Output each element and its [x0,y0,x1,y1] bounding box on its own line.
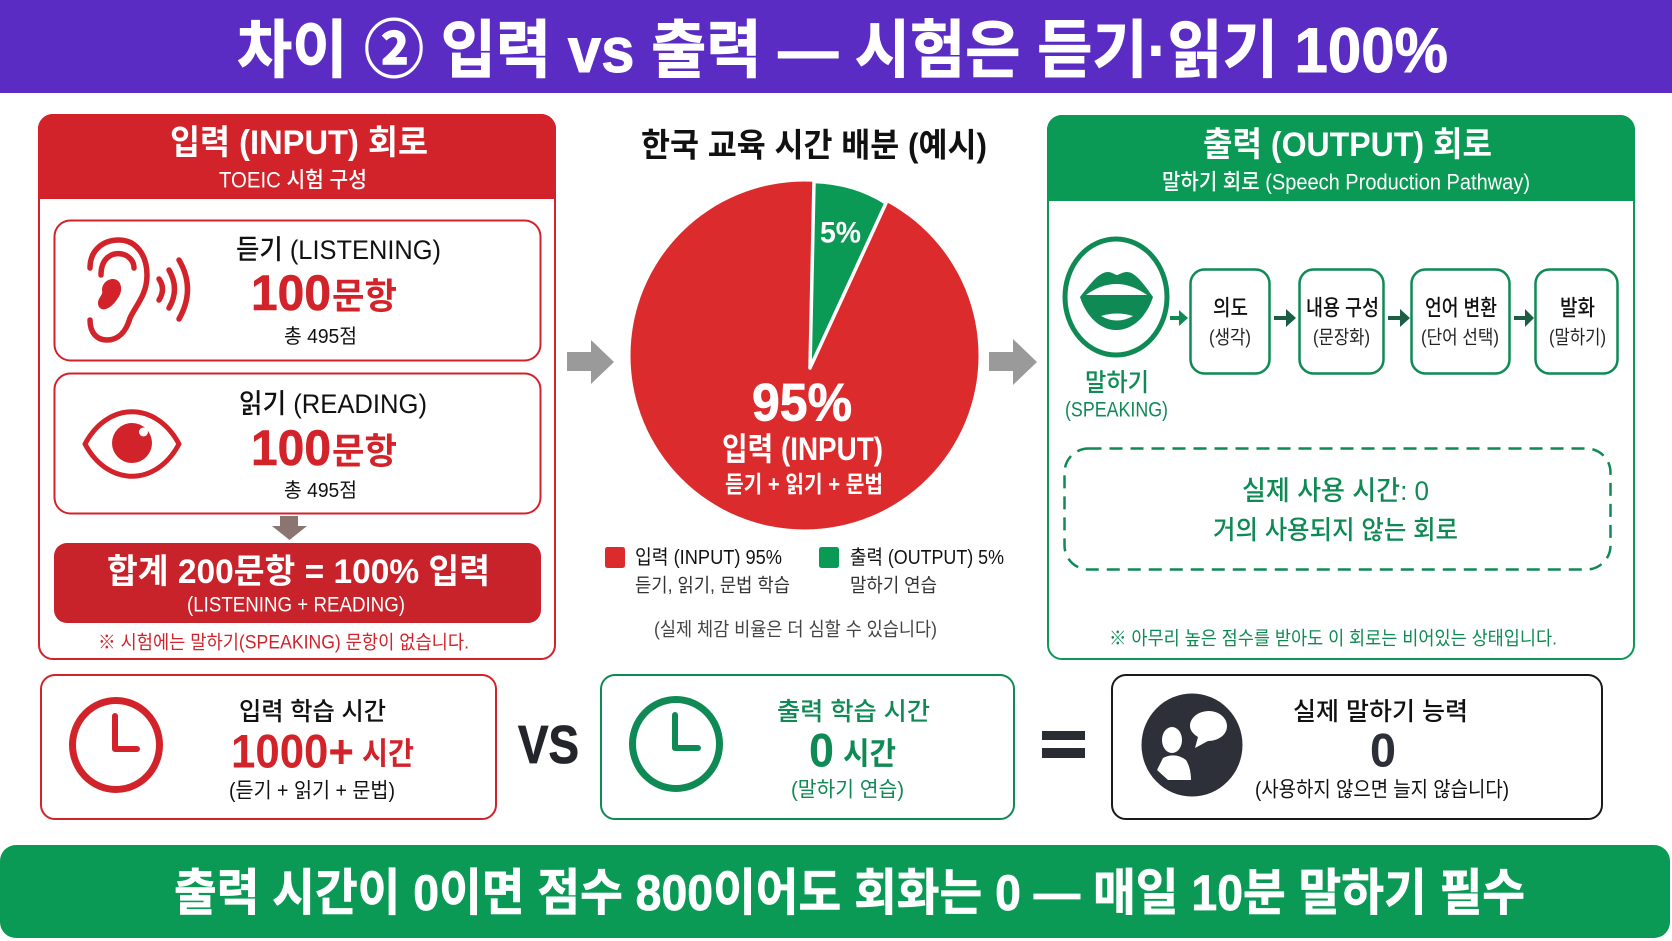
step: utterance: (말하기) [1549,326,1606,348]
step: language: 언어 변환 [1425,296,1497,320]
step: intent: 의도 [1213,296,1248,320]
panel: output circuit [1047,115,1635,659]
legend: input: 입력 (INPUT) 95% [635,546,782,569]
total box: (LISTENING + READING) [187,594,405,616]
step: content: (문장화) [1313,326,1370,348]
total box: 합계 200문항 = 100% 입력 [107,553,490,591]
card: input study time: 1000+ [231,724,354,778]
card: actual speaking ability [1112,675,1602,819]
speaking label: 말하기 [1085,369,1149,397]
input panel header: 입력 (INPUT) 회로 [170,124,428,162]
step: utterance [1536,270,1618,374]
listening card [54,220,540,360]
step: language: (단어 선택) [1421,326,1499,348]
input panel header: TOEIC 시험 구성 [219,168,367,192]
symbol: equals [1042,731,1085,758]
output panel header: 말하기 회로 (Speech Production Pathway) [1162,170,1530,194]
slice label 95%: 95% [752,374,852,432]
arrow: language to utterance [1514,309,1534,327]
slice description: 듣기 + 읽기 + 문법 [725,471,883,497]
output panel footnote: ※ 아무리 높은 점수를 받아도 이 회로는 비어있는 상태입니다. [1109,628,1557,650]
arrow: chart to output [989,339,1037,385]
icon: speaker with bubble [1142,694,1242,796]
speaking label: (SPEAKING) [1065,398,1168,422]
total box [54,543,541,623]
card: output study time: 출력 학습 시간 [777,698,930,726]
legend: output: 출력 (OUTPUT) 5% [850,546,1004,569]
legend: output: 말하기 연습 [850,574,937,596]
listening label: 듣기 (LISTENING) [236,235,441,265]
card: input study time: 시간 [362,736,414,772]
step: utterance: 발화 [1560,296,1595,320]
panel: input circuit [38,114,556,659]
input panel header [38,114,556,199]
step: content [1300,270,1384,374]
arrow: intent to content [1274,309,1296,327]
step: language [1412,270,1510,374]
output panel header [1047,115,1635,201]
label: VS: VS [518,715,579,775]
listening score: 총 495점 [284,325,357,348]
icon: green clock [632,700,720,788]
arrow: input to chart [567,340,614,384]
reading question count: 100 [251,420,331,476]
icon: eye [85,412,179,476]
output panel header: 출력 (OUTPUT) 회로 [1203,126,1492,164]
speaking label [1065,369,1168,422]
step: intent [1190,270,1270,374]
listening question count: 문항 [332,276,397,316]
card: output study time [601,675,1014,819]
step: content: 내용 구성 [1306,296,1379,320]
chart heading: 한국 교육 시간 배분 (예시) [641,126,987,164]
callout: unused circuit: 거의 사용되지 않는 회로 [1213,515,1458,545]
legend: output [819,546,1004,596]
arrow: down to total [272,516,307,540]
icon: ear with sound waves [90,240,188,340]
callout: unused circuit: 실제 사용 시간: 0 [1242,476,1429,506]
title banner [0,0,1672,93]
card: input study time: (듣기 + 읽기 + 문법) [229,780,395,802]
icon: mouth [1065,239,1167,355]
slice label input: 입력 (INPUT) [722,431,883,467]
card: actual speaking ability: 실제 말하기 능력 [1293,698,1468,726]
icon: red clock [72,700,160,790]
listening question count [251,265,397,321]
reading label: 읽기 (READING) [239,389,427,419]
pie slice: output 5% [810,182,886,368]
slice label 5%: 5% [820,216,861,250]
card: output study time: 0 [809,724,834,776]
card: actual speaking ability: 0 [1370,724,1396,776]
card: input study time: 입력 학습 시간 [239,698,386,726]
legend: input [605,546,790,596]
chart note: (실제 체감 비율은 더 심할 수 있습니다) [654,618,937,640]
card: output study time: (말하기 연습) [791,778,904,802]
card: output study time: 시간 [843,736,896,772]
reading question count: 문항 [332,430,397,472]
pie chart [630,182,978,530]
card: actual speaking ability: (사용하지 않으면 늘지 않습니다) [1255,778,1509,802]
callout: unused circuit [1064,448,1610,570]
reading card [54,374,540,514]
reading score: 총 495점 [284,479,357,502]
arrow: speaking to intent [1170,310,1188,326]
input panel footnote: ※ 시험에는 말하기(SPEAKING) 문항이 없습니다. [98,632,469,654]
card: input study time [41,675,496,819]
reading question count [251,420,397,476]
listening question count: 100 [251,265,331,321]
step: intent: (생각) [1209,326,1251,348]
conclusion banner [0,845,1670,938]
conclusion banner: 출력 시간이 0이면 점수 800이어도 회화는 0 — 매일 10분 말하기 필수 [174,865,1525,921]
title banner: 차이 ② 입력 vs 출력 — 시험은 듣기·읽기 100% [237,16,1448,86]
arrow: content to language [1388,309,1410,327]
legend: input: 듣기, 읽기, 문법 학습 [635,574,790,596]
